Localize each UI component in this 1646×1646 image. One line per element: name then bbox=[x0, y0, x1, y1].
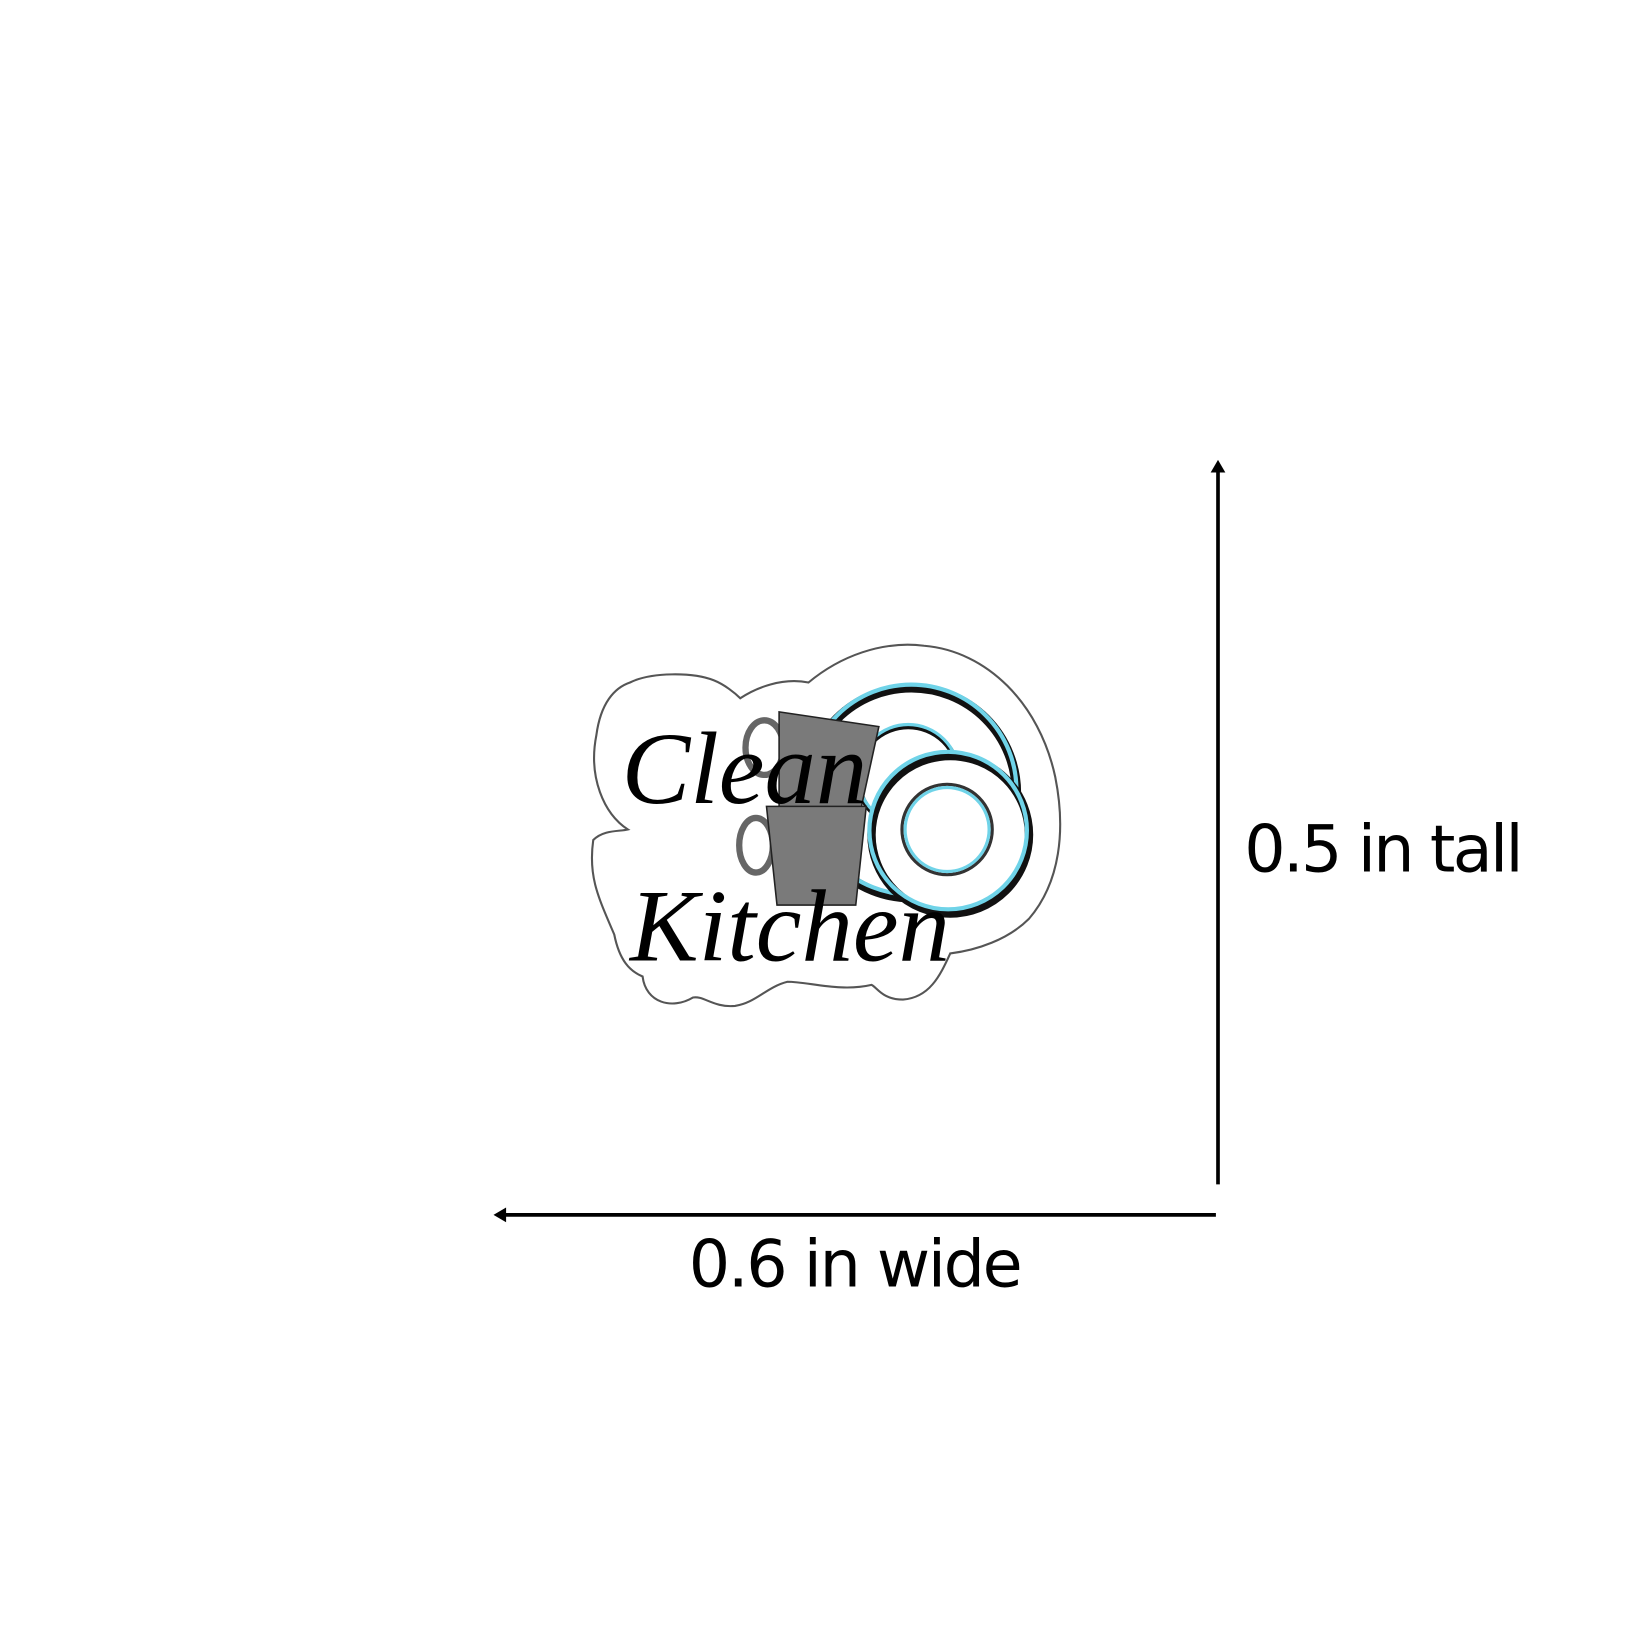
arrow: vertical height bbox=[1211, 460, 1225, 1184]
sticker: clean kitchen bbox=[592, 645, 1060, 1006]
label: 0.5 in tall: 0.5 in tall bbox=[1244, 812, 1524, 887]
label: 0.6 in wide: 0.6 in wide bbox=[689, 1227, 1023, 1302]
icon: plates bbox=[806, 685, 1029, 913]
text: Clean Kitchen bbox=[622, 712, 950, 984]
text: Clean Kitchen: Kitchen bbox=[628, 870, 950, 984]
icon: mugs bbox=[739, 712, 879, 905]
arrow: horizontal width bbox=[493, 1208, 1216, 1222]
text: Clean Kitchen: Clean bbox=[622, 712, 867, 826]
sticker outline bbox=[592, 645, 1060, 1006]
